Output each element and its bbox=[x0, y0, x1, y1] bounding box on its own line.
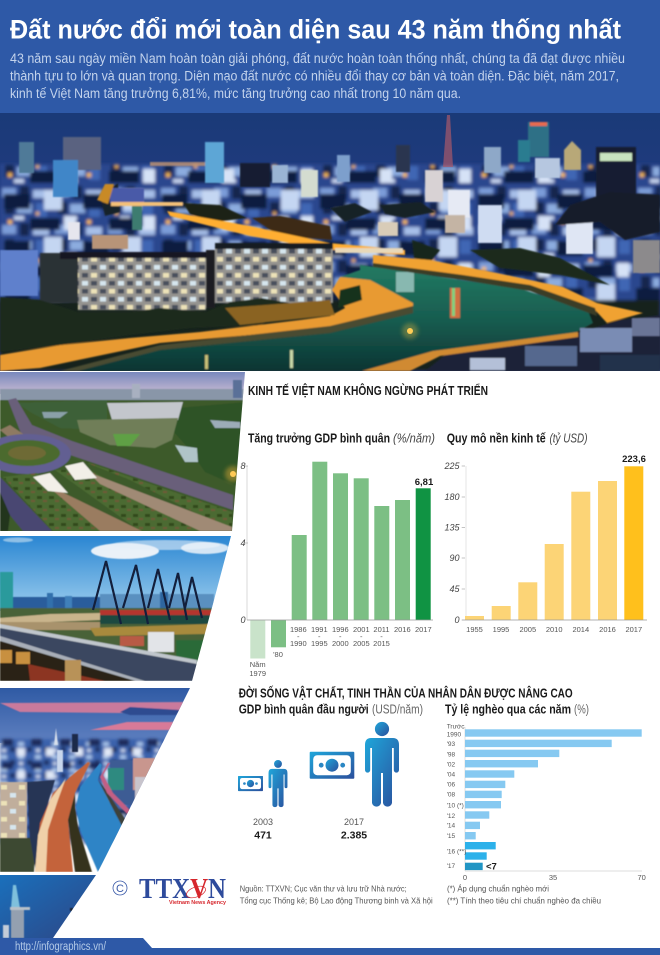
bar chart: GDP growth: - bbox=[318, 632, 321, 641]
tall building on left bbox=[0, 782, 27, 838]
bar chart: poverty rate: '15 bbox=[447, 833, 456, 840]
river bbox=[60, 265, 593, 371]
roundabout bbox=[0, 434, 71, 474]
bar chart: GDP growth: 1991 bbox=[311, 625, 328, 634]
mid-ground pale buildings bbox=[425, 170, 443, 202]
chart heading: poverty rate: Tỷ lệ nghèo qua các năm bbox=[445, 702, 571, 716]
bar chart: GDP growth: Năm bbox=[250, 660, 266, 669]
bar chart: poverty rate bbox=[447, 724, 646, 882]
source note bbox=[240, 884, 433, 906]
footer band bbox=[0, 938, 660, 955]
highway bbox=[8, 398, 233, 510]
bar chart: economy size: 45 bbox=[449, 584, 460, 594]
bar chart: GDP growth: 2017 bbox=[415, 625, 432, 634]
logo: TTXVN: Vietnam News Agency bbox=[169, 900, 227, 906]
dark tree masses bbox=[555, 192, 660, 240]
bridge arches bbox=[93, 561, 202, 624]
chart heading: GDP growth: (%/năm) bbox=[393, 432, 435, 446]
bar chart: economy size bbox=[443, 454, 647, 634]
value label: <7 bbox=[486, 862, 497, 872]
icon: small banknote bbox=[238, 776, 263, 791]
chart heading: GDP per capita: (USD/năm) bbox=[372, 702, 423, 716]
bar chart: GDP growth: 2005 bbox=[353, 639, 370, 648]
bar chart: poverty rate: 0 bbox=[463, 873, 467, 882]
bar chart: poverty rate: '98 bbox=[447, 751, 456, 758]
chart heading: GDP per capita: GDP bình quân đầu người bbox=[239, 702, 369, 716]
buildings lower right bbox=[425, 315, 660, 371]
right bank buildings bbox=[110, 760, 136, 806]
bar chart: GDP growth: 1990 bbox=[290, 639, 307, 648]
icon: small person bbox=[269, 760, 287, 807]
bar chart: economy size: 2010 bbox=[546, 625, 563, 634]
bar chart: economy size: 2014 bbox=[572, 625, 589, 634]
chart heading: GDP growth: Tăng trưởng GDP bình quân bbox=[248, 432, 390, 446]
bar chart: poverty rate: '02 bbox=[447, 762, 456, 769]
bar chart: GDP growth: 2001 bbox=[353, 625, 370, 634]
values bbox=[253, 817, 367, 842]
logo: TTXVN: TTXVN bbox=[139, 873, 226, 905]
bar chart: poverty rate: '16 (**) bbox=[447, 848, 466, 855]
bar chart: GDP growth: 8 bbox=[240, 461, 246, 471]
lamp glow bbox=[230, 471, 236, 477]
main photo: night city and canal bbox=[0, 113, 660, 371]
bar chart: poverty rate: '06 bbox=[447, 782, 456, 789]
header panel bbox=[0, 0, 660, 114]
lower left road bbox=[0, 477, 52, 531]
orange road along left bank bbox=[0, 277, 413, 371]
bar chart: poverty rate: '12 bbox=[447, 813, 456, 820]
bar chart: poverty rate: '10 (*) bbox=[447, 803, 464, 810]
bar chart: economy size: 180 bbox=[444, 492, 460, 502]
upper orange road bbox=[167, 211, 405, 255]
value label: 223,6 bbox=[622, 454, 646, 465]
bar chart: GDP growth bbox=[240, 461, 434, 678]
bar chart: GDP growth: - bbox=[297, 632, 300, 641]
road bbox=[35, 762, 90, 872]
medians bbox=[90, 464, 232, 526]
bar chart: economy size: 135 bbox=[444, 522, 460, 532]
bar chart: poverty rate: 1990 bbox=[447, 732, 462, 738]
copyright symbol bbox=[113, 881, 127, 895]
bar chart: economy size: 0 bbox=[454, 615, 460, 625]
website url: http://infographics.vn/ bbox=[15, 941, 107, 953]
skyline towers bbox=[19, 142, 34, 173]
bar chart: poverty rate: 35 bbox=[549, 873, 557, 882]
river bbox=[76, 763, 123, 872]
bar chart: poverty rate: '17 bbox=[447, 863, 456, 870]
source note: Nguồn: TTXVN; Cục văn thư và lưu trữ Nhà nước; bbox=[240, 884, 407, 894]
bar chart: GDP growth: 2016 bbox=[394, 625, 411, 634]
icon: large person bbox=[365, 722, 399, 807]
bar chart: GDP growth: 1995 bbox=[311, 639, 328, 648]
bar chart: economy size: 225 bbox=[443, 461, 460, 471]
values: 2017 bbox=[344, 817, 364, 827]
bar chart: GDP growth: 1986 bbox=[290, 625, 307, 634]
left lower dark ground bbox=[0, 838, 36, 872]
chart heading: economy size: (tỷ USD) bbox=[550, 432, 588, 446]
bar chart: poverty rate: '93 bbox=[447, 741, 456, 748]
section heading: living standards: ĐỜI SỐNG VẬT CHẤT, TINH THẦN CỦA NHÂN DÂN ĐƯỢC NÂNG CAO bbox=[239, 686, 573, 700]
bar chart: GDP growth: 1979 bbox=[249, 669, 266, 678]
photo: river at dusk bbox=[0, 688, 192, 872]
red radio tower bbox=[443, 115, 453, 167]
bar chart: economy size: 1995 bbox=[493, 625, 509, 634]
values: 2.385 bbox=[341, 830, 367, 842]
pictogram: GDP per capita bbox=[238, 722, 399, 842]
intro text: kinh tế Việt Nam tăng trưởng 6,81%, mức tăng trưởng cao nhất trong 10 năm qua. bbox=[10, 86, 461, 101]
title: Đất nước đổi mới toàn diện sau 43 năm thống nhất bbox=[10, 14, 621, 44]
bar chart: GDP growth: '80 bbox=[273, 650, 283, 659]
street lamp flare bbox=[407, 328, 413, 334]
bar chart: poverty rate: 70 bbox=[638, 873, 646, 882]
photo: bridge bbox=[0, 536, 232, 681]
value label: 6,81 bbox=[415, 477, 434, 488]
highway bbox=[0, 627, 197, 681]
footnotes bbox=[447, 884, 601, 906]
intro text: thành tựu to lớn và quan trọng. Diện mạo đất nước có nhiều đổi thay cơ bản và toàn diện. Đặc biệt, năm 2017, bbox=[10, 68, 619, 84]
intro text bbox=[10, 51, 625, 101]
bar chart: GDP growth: - bbox=[339, 632, 342, 641]
values: 2003 bbox=[253, 817, 273, 827]
values: 471 bbox=[254, 830, 272, 842]
section heading: economy: KINH TẾ VIỆT NAM KHÔNG NGỪNG PHÁT TRIỂN bbox=[248, 383, 488, 398]
chart heading: poverty rate: (%) bbox=[574, 702, 589, 716]
bar chart: GDP growth: 1996 bbox=[332, 625, 349, 634]
bar chart: GDP growth: 4 bbox=[240, 538, 246, 548]
bar chart: economy size: 90 bbox=[449, 553, 460, 563]
bar chart: economy size: 2017 bbox=[625, 625, 642, 634]
bar chart: poverty rate: '08 bbox=[447, 792, 456, 799]
bar chart: economy size: 1955 bbox=[466, 625, 483, 634]
bar chart: GDP growth: 2000 bbox=[332, 639, 349, 648]
photo: road interchange bbox=[0, 372, 246, 532]
distant trees and park bbox=[174, 402, 242, 485]
source note: Tổng cục Thống kê; Bộ Lao động Thương binh và Xã hội bbox=[240, 896, 433, 906]
bar chart: poverty rate: '04 bbox=[447, 772, 456, 779]
intro text: 43 năm sau ngày miền Nam hoàn toàn giải phóng, đất nước hoàn toàn thống nhất, chúng ta đã đạt được nhiều bbox=[10, 51, 625, 66]
bar chart: GDP growth: 2015 bbox=[373, 639, 390, 648]
bar chart: GDP growth: - bbox=[380, 632, 383, 641]
photo: tower against blue sky bbox=[0, 875, 97, 939]
bar chart: GDP growth: - bbox=[360, 632, 363, 641]
footnotes: (*) Áp dụng chuẩn nghèo mới bbox=[447, 884, 549, 894]
bar chart: poverty rate: '14 bbox=[447, 822, 456, 829]
footnotes: (**) Tính theo tiêu chí chuẩn nghèo đa chiều bbox=[447, 896, 601, 906]
chart heading: economy size: Quy mô nền kinh tế bbox=[447, 432, 546, 446]
left pale blue block bbox=[0, 250, 38, 296]
far canal and bridge bbox=[110, 188, 144, 203]
orange road on right bank bbox=[373, 255, 643, 323]
bar chart: economy size: 2016 bbox=[599, 625, 616, 634]
bar chart: economy size: 2005 bbox=[519, 625, 536, 634]
bar chart: GDP growth: 2011 bbox=[373, 625, 390, 634]
bar chart: GDP growth: 0 bbox=[240, 615, 246, 625]
bar chart: poverty rate: Trước bbox=[447, 724, 465, 730]
icon: large banknote bbox=[310, 752, 354, 779]
trees lower left bbox=[0, 297, 300, 352]
copyright symbol: C bbox=[116, 883, 124, 895]
